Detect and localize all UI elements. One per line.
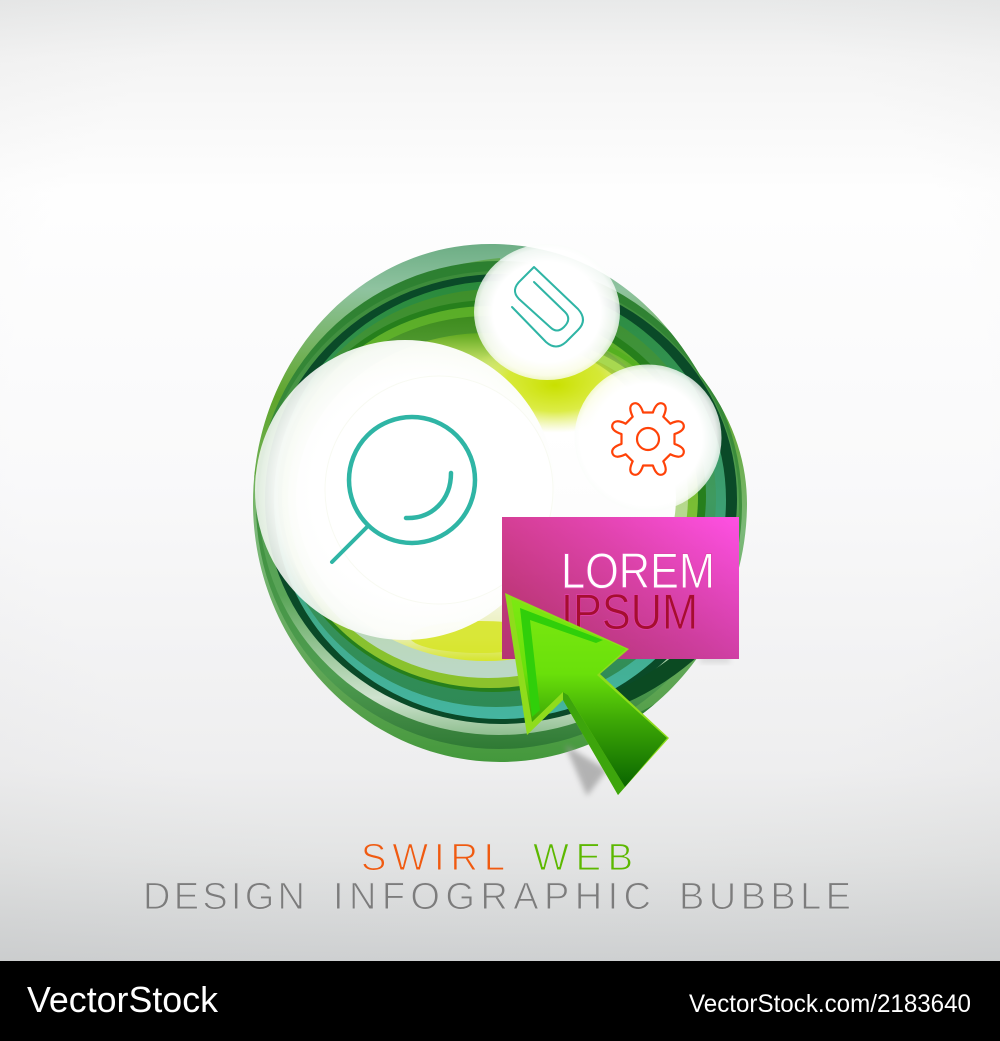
swirl circle — [240, 235, 760, 775]
title: swirl web: SWIRL — [361, 837, 505, 879]
paperclip bubble — [474, 244, 620, 380]
title: swirl web: WEB — [533, 837, 633, 879]
icon: magnifier — [332, 417, 475, 562]
gear bubble — [574, 364, 722, 512]
footer image id: VectorStock.com/2183640 — [689, 990, 971, 1018]
subtitle: INFOGRAPHIC — [333, 876, 651, 918]
label text: LOREM: LOREM — [561, 543, 715, 599]
arrow cursor — [505, 593, 669, 796]
subtitle: BUBBLE — [679, 876, 851, 918]
footer brand: VectorStock — [27, 979, 219, 1020]
large bubble with magnifier — [255, 340, 555, 640]
icon: gear — [612, 403, 684, 475]
label text: IPSUM: IPSUM — [561, 584, 698, 640]
subtitle: DESIGN — [143, 876, 305, 918]
icon: paperclip — [512, 267, 583, 346]
title: swirl web — [361, 837, 633, 879]
subtitle — [143, 876, 851, 918]
pink label card — [502, 517, 739, 663]
footer bar — [0, 961, 1000, 1041]
